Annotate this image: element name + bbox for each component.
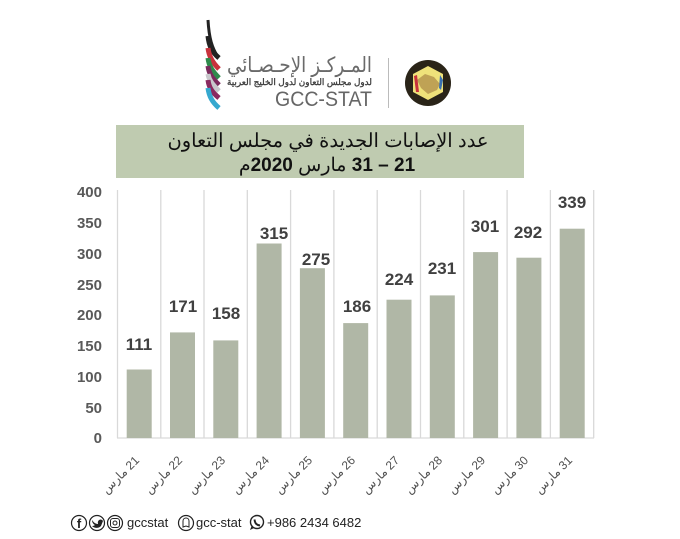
handle: gcc-stat: gcc-stat bbox=[196, 515, 242, 530]
bar value labels: 275 bbox=[302, 250, 330, 269]
icon: instagram bbox=[108, 516, 122, 530]
bar value labels: 158 bbox=[212, 304, 240, 323]
bar value labels: 301 bbox=[471, 217, 499, 236]
logo: Arabic name: المـركـز الإحـصـائي bbox=[227, 54, 372, 78]
y axis labels: 50 bbox=[85, 400, 102, 417]
logo: GCC-STAT ribbons bbox=[208, 20, 219, 108]
x axis date labels: 28 مارس bbox=[402, 453, 445, 497]
y axis labels: 200 bbox=[77, 307, 102, 324]
y axis labels: 150 bbox=[77, 338, 102, 355]
y axis labels bbox=[77, 184, 102, 447]
phone number: +986 2434 6482 bbox=[267, 515, 361, 530]
bar value labels: 171 bbox=[169, 297, 197, 316]
icon: GCC emblem bbox=[405, 60, 451, 106]
x axis date labels: 24 مارس bbox=[229, 453, 272, 497]
logo: GCC-STAT wordmark: GCC-STAT bbox=[275, 88, 372, 111]
logo: Arabic subtitle: لدول مجلس التعاون لدول الخليج العربية bbox=[227, 77, 372, 88]
title banner bbox=[116, 125, 524, 178]
bar chart bbox=[77, 184, 594, 497]
bars bbox=[127, 229, 585, 438]
y axis labels: 250 bbox=[77, 277, 102, 294]
footer: social contacts bbox=[72, 515, 361, 531]
icon: facebook bbox=[72, 516, 86, 531]
bar value labels: 224 bbox=[385, 270, 414, 289]
icon: whatsapp bbox=[250, 516, 264, 530]
y axis labels: 400 bbox=[77, 184, 102, 201]
handle: gccstat: gccstat bbox=[127, 515, 169, 530]
x axis date labels: 30 مارس bbox=[488, 453, 531, 497]
x axis date labels: 31 مارس bbox=[532, 453, 575, 497]
bar value labels: 315 bbox=[260, 224, 288, 243]
x axis date labels: 26 مارس bbox=[315, 453, 358, 497]
y axis labels: 350 bbox=[77, 215, 102, 232]
x axis date labels: 23 مارس bbox=[185, 453, 228, 497]
title banner: 21 – 31 مارس 2020م bbox=[239, 155, 416, 176]
y axis labels: 0 bbox=[94, 430, 102, 447]
y axis labels: 100 bbox=[77, 369, 102, 386]
bar value labels: 231 bbox=[428, 259, 456, 278]
bar value labels: 111 bbox=[126, 335, 152, 354]
icon: facebook: f bbox=[77, 516, 82, 531]
icon: snapchat bbox=[178, 516, 194, 530]
y axis labels: 300 bbox=[77, 246, 102, 263]
bar value labels: 186 bbox=[343, 297, 371, 316]
title banner: عدد الإصابات الجديدة في مجلس التعاون bbox=[168, 130, 488, 152]
x axis date labels bbox=[99, 453, 575, 497]
x axis date labels: 21 مارس bbox=[99, 453, 142, 497]
x axis date labels: 22 مارس bbox=[142, 453, 185, 497]
x axis date labels: 25 مارس bbox=[272, 453, 315, 497]
icon: twitter bbox=[90, 516, 104, 530]
x axis date labels: 27 مارس bbox=[359, 453, 402, 497]
x axis date labels: 29 مارس bbox=[445, 453, 488, 497]
bar value labels bbox=[126, 193, 586, 354]
bar value labels: 339 bbox=[558, 193, 586, 212]
bar value labels: 292 bbox=[514, 223, 542, 242]
